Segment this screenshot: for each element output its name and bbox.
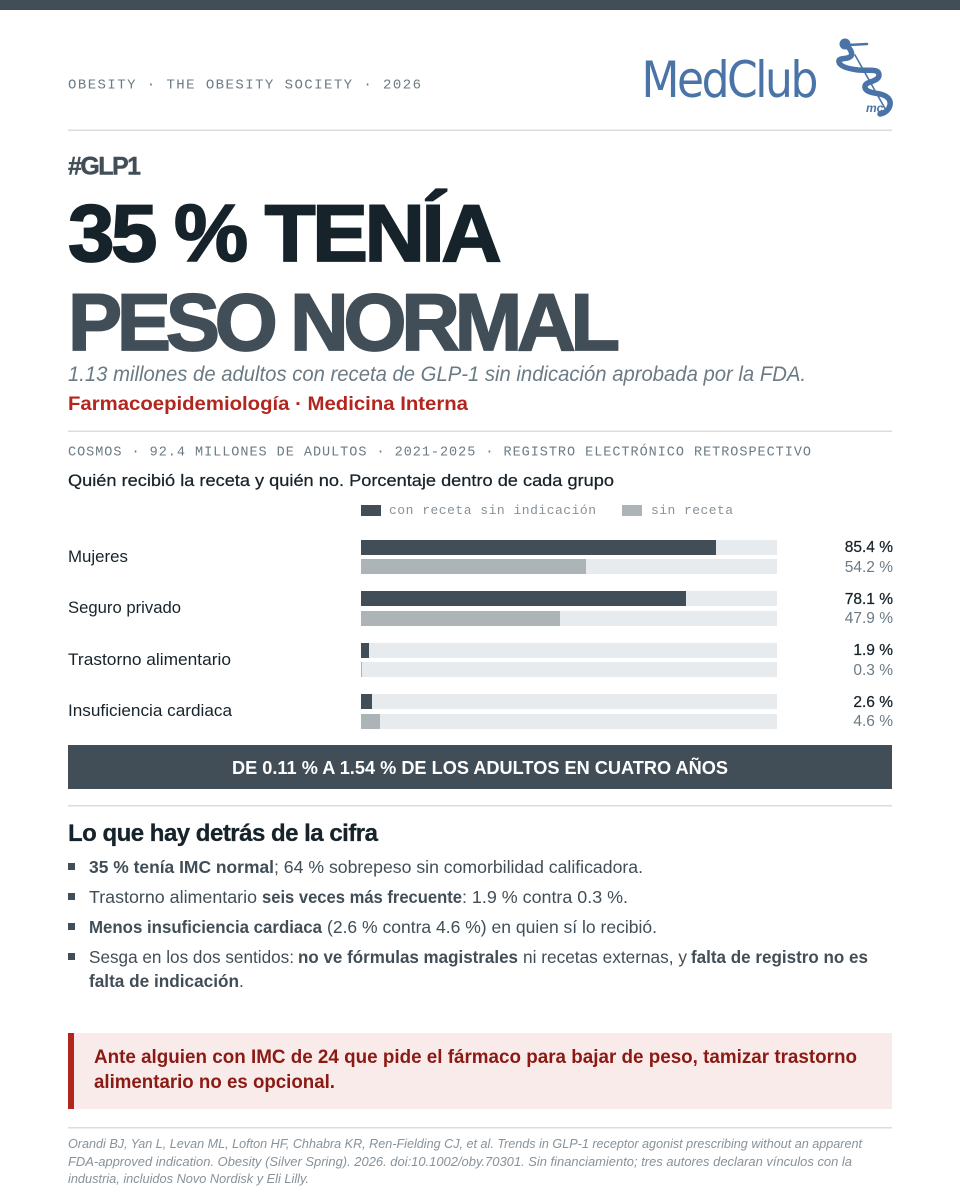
row: Mujeres: 85.4 %: [845, 539, 893, 556]
bullet 4: .: [239, 971, 244, 991]
citation footer: industria, incluidos Novo Nordisk y Eli Lilly.: [68, 1171, 309, 1186]
banner: [68, 745, 892, 789]
citation footer: FDA-approved indication. Obesity (Silver Spring). 2026. doi:10.1002/oby.70301. Sin financiamiento; tres autores declaran vínculos con la: [68, 1154, 852, 1169]
row: Mujeres: 54.2 %: [845, 559, 893, 576]
bar chart: [68, 539, 893, 730]
bullet 4: falta de indicación: [89, 971, 239, 991]
logo: MedClub: [642, 38, 890, 115]
legend: con receta sin indicación: [389, 503, 596, 518]
callout: [68, 1033, 892, 1109]
logo: MedClub: MedClub: [642, 51, 818, 110]
bullet 1: ; 64 % sobrepeso sin comorbilidad calificadora.: [274, 857, 643, 877]
row: Insuficiencia cardiaca: Insuficiencia cardiaca: [68, 701, 233, 720]
row: Trastorno alimentario: 0.3 %: [853, 662, 893, 679]
row: Trastorno alimentario: Trastorno alimentario: [68, 650, 231, 669]
bullet 2: seis veces más frecuente: [262, 887, 462, 907]
bullet 2: [68, 887, 628, 907]
citation footer: Orandi BJ, Yan L, Levan ML, Lofton HF, Chhabra KR, Ren-Fielding CJ, et al. Trends in GLP-1 receptor agonist prescribing without an apparent: [68, 1136, 863, 1151]
bullet 1: 35 % tenía IMC normal: [89, 857, 274, 877]
title line 1: 35 % TENÍA: [68, 189, 502, 279]
row: Mujeres: [68, 539, 893, 576]
chart heading: Quién recibió la receta y quién no. Porcentaje dentro de cada grupo: [68, 471, 614, 490]
callout: alimentario no es opcional.: [94, 1072, 335, 1093]
row: Trastorno alimentario: 1.9 %: [853, 642, 893, 659]
row: Insuficiencia cardiaca: 4.6 %: [853, 713, 893, 730]
bullet 2: Trastorno alimentario: [89, 887, 257, 907]
header source line: OBESITY · THE OBESITY SOCIETY · 2026: [68, 78, 421, 94]
subtitle: 1.13 millones de adultos con receta de GLP-1 sin indicación aprobada por la FDA.: [68, 363, 806, 386]
top bar: [0, 0, 960, 10]
bullet 4: [68, 947, 868, 991]
hashtag: #GLP1: [68, 152, 141, 180]
bullet 1: [68, 857, 643, 877]
bullet 4: no ve fórmulas magistrales: [298, 947, 518, 967]
title line 2: PESO NORMAL: [68, 278, 620, 368]
icon: snake and staff: mc: [866, 101, 884, 115]
bullet 4: Sesga en los dos sentidos:: [89, 947, 294, 967]
row: Seguro privado: 47.9 %: [845, 610, 893, 627]
specialty tag: Farmacoepidemiología · Medicina Interna: [68, 393, 468, 415]
bullet 4: ni recetas externas, y: [523, 947, 687, 967]
bullet 3: (2.6 % contra 4.6 %) en quien sí lo recibió.: [327, 917, 657, 937]
bullet 3: [68, 917, 657, 937]
row: Insuficiencia cardiaca: 2.6 %: [853, 694, 893, 711]
row: Mujeres: Mujeres: [68, 547, 128, 566]
row: Trastorno alimentario: [68, 642, 893, 679]
citation footer: [68, 1136, 863, 1186]
banner: DE 0.11 % A 1.54 % DE LOS ADULTOS EN CUATRO AÑOS: [232, 757, 728, 778]
bullet list: [68, 857, 868, 991]
callout: Ante alguien con IMC de 24 que pide el fármaco para bajar de peso, tamizar trastorno: [94, 1047, 857, 1068]
icon: snake and staff: [839, 38, 890, 115]
row: Seguro privado: 78.1 %: [845, 591, 893, 608]
bullet 2: : 1.9 % contra 0.3 %.: [462, 887, 628, 907]
bullet 4: falta de registro no es: [691, 947, 868, 967]
bullet 3: Menos insuficiencia cardiaca: [89, 917, 322, 937]
section heading: Lo que hay detrás de la cifra: [68, 820, 379, 847]
row: Seguro privado: Seguro privado: [68, 598, 181, 617]
legend: sin receta: [651, 503, 733, 518]
row: Seguro privado: [68, 591, 893, 627]
row: Insuficiencia cardiaca: [68, 694, 893, 730]
study data line: COSMOS · 92.4 MILLONES DE ADULTOS · 2021-2025 · REGISTRO ELECTRÓNICO RETROSPECTIVO: [68, 444, 811, 460]
legend: [361, 503, 733, 518]
